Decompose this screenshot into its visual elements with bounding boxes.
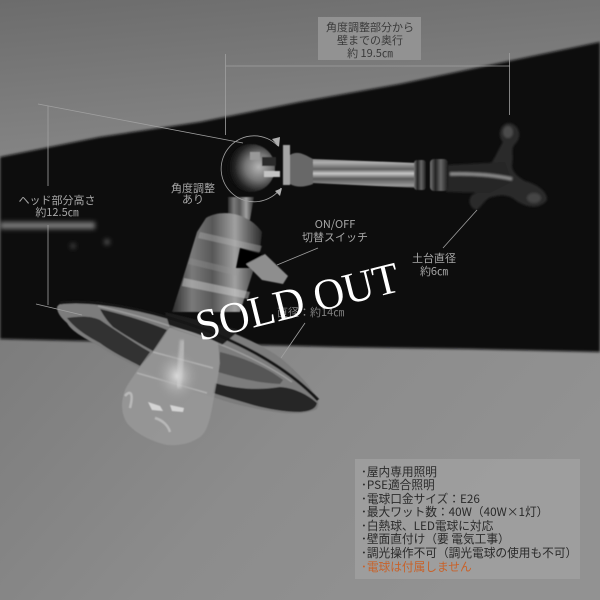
lamp shade xyxy=(57,302,318,414)
angle joint ball xyxy=(227,144,280,192)
leader lines xyxy=(277,210,477,358)
lamp socket xyxy=(172,197,262,312)
dark wall band xyxy=(0,42,600,352)
label: depth: 約 19.5㎝ xyxy=(347,45,393,61)
spec line 3: ･電球口金サイズ：E26 xyxy=(361,490,480,507)
label: angle adjustable: 角度調整 xyxy=(171,180,215,196)
label: base diameter value: 約6㎝ xyxy=(420,263,448,279)
spec line 8: warning: ･電球は付属しません xyxy=(361,558,472,575)
wall background: upper xyxy=(0,0,600,170)
label: head height value: 約12.5㎝ xyxy=(35,204,79,220)
label: depth: 壁までの奥行 xyxy=(337,32,403,48)
wall background: lower xyxy=(0,330,600,600)
spec line 6: ･壁面直付け（要 電気工事） xyxy=(361,530,510,547)
sold out stamp: SOLD OUT xyxy=(191,253,404,351)
spec line 1: ･屋内専用照明 xyxy=(361,463,437,480)
lamp arm tube xyxy=(283,145,448,191)
dimension lines: depth xyxy=(226,53,510,135)
label: head height: ヘッド部分高さ xyxy=(18,192,96,208)
spec line 7: ･調光操作不可（調光電球の使用も不可） xyxy=(361,544,577,561)
label: depth: 角度調整部分から xyxy=(326,19,414,35)
label: angle adjustable 2: あり xyxy=(182,191,204,207)
label: depth xyxy=(318,17,421,61)
dimension lines: head height xyxy=(36,106,82,315)
label: shade diameter: 直径：約14㎝ xyxy=(277,304,344,320)
label: switch: 切替スイッチ xyxy=(302,229,368,245)
spec line 2: ･PSE適合照明 xyxy=(361,476,435,493)
label: base diameter: 土台直径 xyxy=(412,250,456,266)
label: on/off: ON/OFF xyxy=(315,216,355,232)
lamp wall base xyxy=(446,123,547,210)
spec line 5: ･白熱球、LED電球に対応 xyxy=(361,517,494,534)
spec line 4: ･最大ワット数：40W（40W×1灯） xyxy=(361,503,548,520)
angle adjustment leader and arrow circle xyxy=(38,104,282,202)
blurred background lamp reflection xyxy=(0,222,110,249)
light bulb xyxy=(122,327,220,445)
on/off switch xyxy=(236,248,288,284)
panel: specifications xyxy=(355,459,580,579)
